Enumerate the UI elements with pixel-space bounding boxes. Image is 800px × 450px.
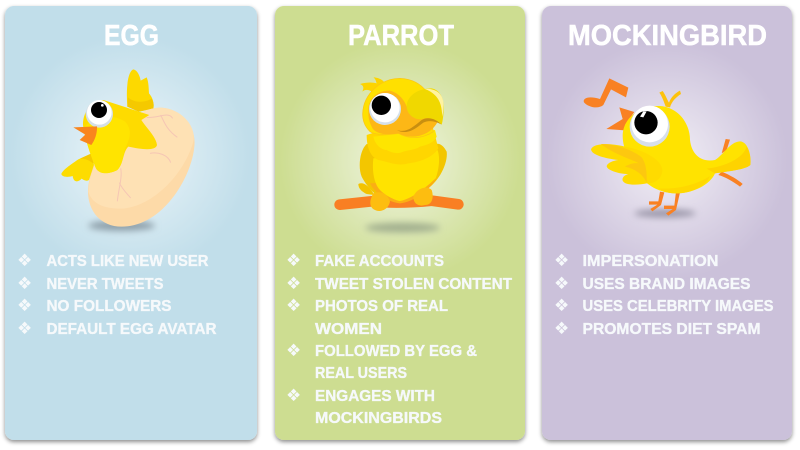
list: parrot traits: WOMEN <box>315 321 382 338</box>
list: parrot traits: MOCKINGBIRDS <box>315 410 442 427</box>
list: parrot traits: FOLLOWED BY EGG & <box>315 343 477 360</box>
list: mockingbird traits: IMPERSONATION <box>582 253 718 270</box>
list: mockingbird traits: ❖ <box>554 319 569 339</box>
list: parrot traits: ❖ <box>286 296 301 316</box>
list: egg traits: ❖ <box>17 251 32 271</box>
list: parrot traits: TWEET STOLEN CONTENT <box>315 276 512 293</box>
list: egg traits: ACTS LIKE NEW USER <box>46 253 209 270</box>
list: mockingbird traits: PROMOTES DIET SPAM <box>582 321 760 338</box>
heading: mockingbird: MOCKINGBIRD <box>568 20 767 52</box>
list: mockingbird traits <box>554 251 774 339</box>
list: mockingbird traits: USES BRAND IMAGES <box>582 276 751 293</box>
icon: parrot bird <box>340 77 458 233</box>
list: mockingbird traits: ❖ <box>554 296 569 316</box>
list: mockingbird traits: ❖ <box>554 274 569 294</box>
panel: mockingbird <box>542 6 792 440</box>
list: egg traits: NO FOLLOWERS <box>46 298 172 315</box>
icon: mockingbird <box>584 78 751 218</box>
list: parrot traits: PHOTOS OF REAL <box>315 298 448 315</box>
list: parrot traits <box>286 251 512 427</box>
list: mockingbird traits: ❖ <box>554 251 569 271</box>
list: egg traits: ❖ <box>17 319 32 339</box>
panel: parrot <box>275 6 525 440</box>
list: egg traits: ❖ <box>17 296 32 316</box>
list: parrot traits: ❖ <box>286 251 301 271</box>
list: egg traits <box>17 251 217 339</box>
list: parrot traits: FAKE ACCOUNTS <box>315 253 444 270</box>
panel: egg <box>5 6 257 440</box>
list: parrot traits: REAL USERS <box>315 365 407 382</box>
list: parrot traits: ❖ <box>286 386 301 406</box>
icon: egg bird <box>61 69 195 231</box>
list: egg traits: NEVER TWEETS <box>46 276 164 293</box>
list: egg traits: DEFAULT EGG AVATAR <box>46 321 217 338</box>
list: parrot traits: ❖ <box>286 274 301 294</box>
heading: parrot: PARROT <box>348 20 454 52</box>
list: parrot traits: ENGAGES WITH <box>315 388 435 405</box>
list: parrot traits: ❖ <box>286 341 301 361</box>
heading: egg: EGG <box>104 20 159 52</box>
list: egg traits: ❖ <box>17 274 32 294</box>
list: mockingbird traits: USES CELEBRITY IMAGES <box>582 298 774 315</box>
